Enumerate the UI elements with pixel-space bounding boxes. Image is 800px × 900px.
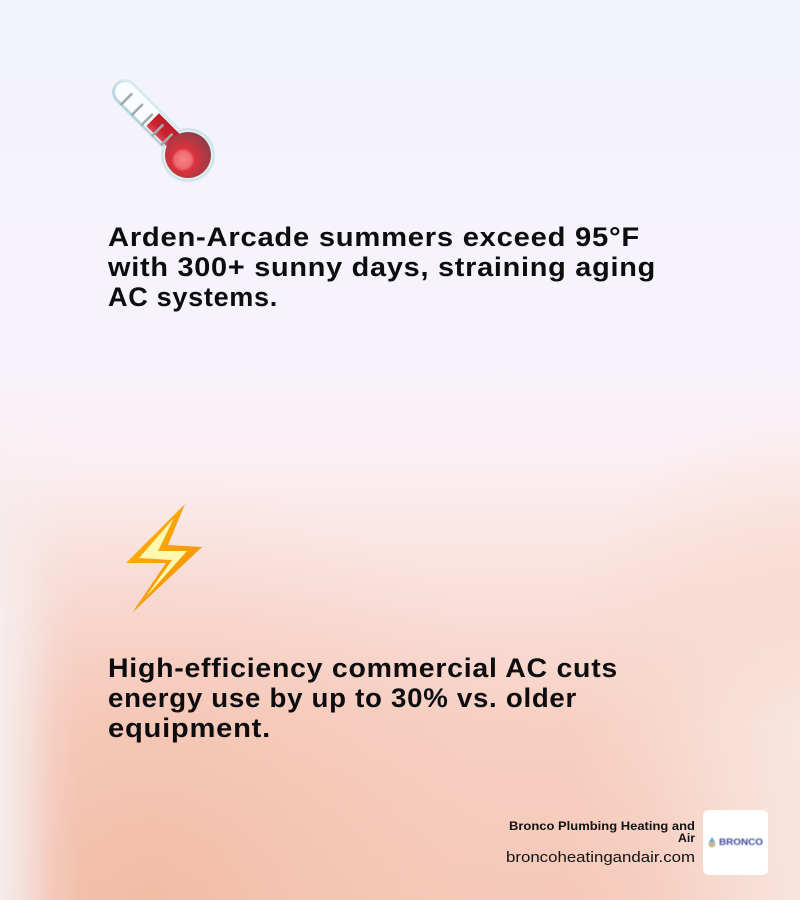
footer: company name and website: Air — [678, 831, 695, 845]
text: energy efficiency fact: equipment. — [108, 713, 271, 743]
logo: Bronco: BRONCO — [719, 837, 763, 847]
logo: Bronco — [703, 810, 768, 875]
text: summer heat fact: with 300+ sunny days, straining aging — [107, 252, 656, 282]
text: summer heat fact: AC systems. — [108, 282, 278, 312]
icon: lightning bolt — [126, 504, 202, 613]
footer: company name and website — [506, 819, 695, 866]
text: summer heat fact — [107, 222, 656, 312]
background gradient — [0, 430, 800, 900]
text: summer heat fact: Arden-Arcade summers exceed 95°F — [108, 222, 640, 252]
footer: company name and website: Bronco Plumbing Heating and — [509, 819, 695, 833]
text: energy efficiency fact: High-efficiency commercial AC cuts — [108, 653, 618, 683]
footer: company name and website: broncoheatingandair.com — [506, 849, 695, 866]
icon: thermometer — [97, 64, 226, 193]
text: energy efficiency fact: energy use by up to 30% vs. older — [108, 683, 577, 713]
text: energy efficiency fact — [108, 653, 618, 743]
